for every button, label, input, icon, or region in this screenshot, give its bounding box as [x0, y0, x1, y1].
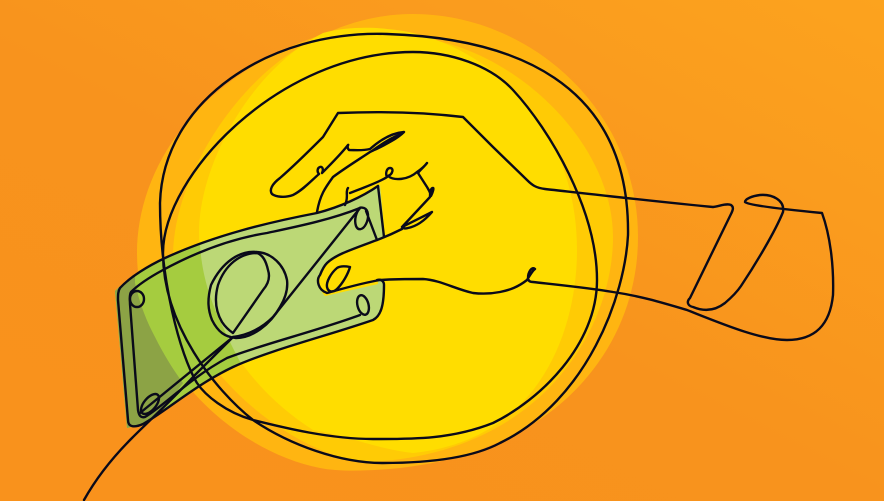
line: index finger and hand top to arm — [271, 112, 833, 340]
blob: outer light orange circle — [137, 14, 638, 471]
blob: middle amber circle — [173, 31, 613, 462]
blob: inner yellow circle — [199, 28, 577, 453]
banknote fill — [115, 185, 385, 428]
thumb yellow fill — [319, 239, 378, 296]
line: banknote inner border — [130, 208, 360, 417]
line: finger tips and knuckles — [345, 163, 433, 228]
line: double spiral loop — [160, 34, 628, 463]
icon: pen-stroke tip on index finger — [370, 132, 404, 152]
line: corner loops — [130, 291, 144, 307]
line: thumbnail — [327, 266, 350, 291]
line: tail and long diagonal — [84, 337, 233, 500]
line: banknote right edge — [378, 186, 384, 237]
continuous ink line: hand, arm and banknote — [84, 34, 833, 500]
line: central circle — [208, 252, 287, 338]
line: banknote outer border — [118, 186, 384, 426]
